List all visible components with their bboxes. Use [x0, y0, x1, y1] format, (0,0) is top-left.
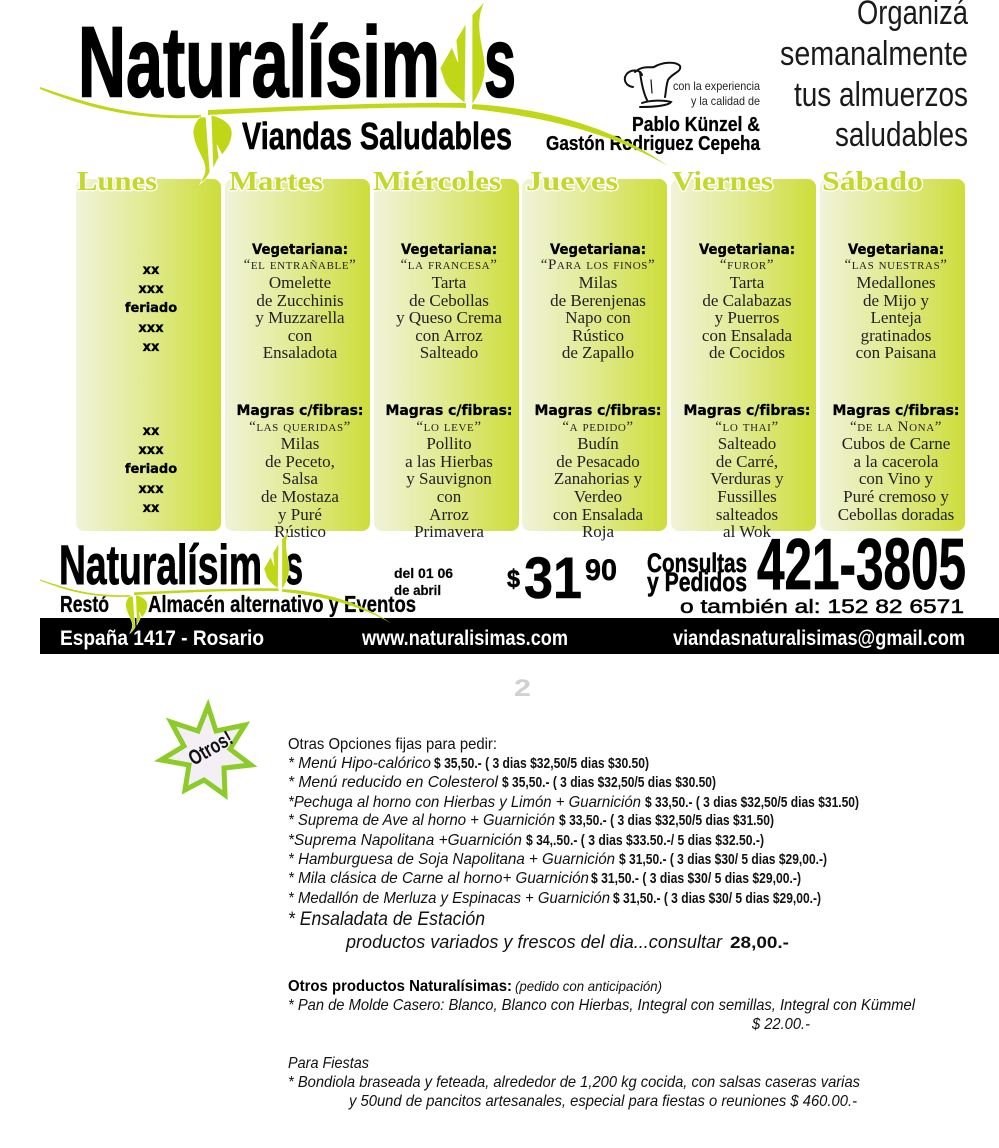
panel: Martes menu: “las queridas” — [249, 419, 351, 435]
text block: other fixed options: $ 31,50.- ( 3 dias $30/ 5 dias $29,00.-) — [613, 890, 821, 907]
title: Naturalísimas logo wordmark: Naturalísim — [78, 6, 440, 118]
text: con la experiencia — [673, 79, 760, 108]
panel: Viernes menu: de Calabazas — [702, 291, 792, 310]
text: Consultas y Pedidos — [647, 548, 747, 597]
panel: Martes menu: Ensaladota — [263, 343, 338, 362]
panel: Martes menu: Milas — [281, 434, 319, 453]
panel: Martes menu: con — [288, 326, 313, 345]
text: Restó Almacén alternativo y Eventos — [60, 591, 416, 617]
panel: Miércoles menu: con Arroz — [415, 326, 483, 345]
text block: other products — [288, 978, 915, 1033]
text: chefs names — [546, 114, 761, 155]
panel: Miércoles menu: “la francesa” — [400, 257, 498, 273]
panel: Martes menu: y Muzzarella — [255, 308, 345, 327]
footer bar: address and contact — [40, 618, 999, 654]
panel: Miércoles menu: Tarta — [432, 273, 467, 292]
panel: Jueves menu — [534, 242, 662, 541]
panel: Sábado menu: “de la Nona” — [850, 419, 942, 435]
logo: footer Naturalísimas wordmark: s — [285, 533, 303, 596]
panel: Miércoles menu: y Sauvignon — [406, 469, 492, 488]
panel: Sábado menu: con Paisana — [856, 343, 937, 362]
panel: Viernes menu — [684, 242, 810, 541]
slogan: Organizá semanalmente — [780, 0, 968, 154]
text: con la experiencia: y la calidad de — [691, 94, 760, 108]
footer bar: address and contact: España 1417 - Rosario — [60, 627, 264, 650]
text block: other fixed options: $ 35,50.- ( 3 dias $32,50/5 dias $30.50) — [502, 774, 716, 791]
heading: Jueves: Jueves — [526, 166, 618, 196]
price: $31.90: 31 — [524, 546, 582, 611]
panel: Jueves menu: Budín — [577, 434, 619, 453]
panel: Martes menu: de Mostaza — [261, 487, 339, 506]
text: Consultas y Pedidos: Consultas — [647, 548, 747, 578]
panel: Miércoles menu: de Cebollas — [409, 291, 489, 310]
panel: Jueves menu: “Para los finos” — [541, 257, 655, 273]
panel: Viernes menu: Magras c/fibras: — [684, 403, 810, 419]
text block: other fixed options: productos variados y frescos del dia...consultar — [345, 932, 723, 952]
panel: Lunes feriado: xx — [143, 263, 160, 278]
heading: Sábado: Sábado — [822, 166, 923, 196]
panel: Sábado menu: Cebollas doradas — [838, 505, 954, 524]
panel: Sábado menu: Cubos de Carne — [842, 434, 950, 453]
logo: footer Naturalísimas wordmark: Naturalísim — [59, 533, 262, 596]
text block: other fixed options: *Pechuga al horno con Hierbas y Limón + Guarnición — [288, 794, 641, 811]
text: date del 01 06 de abril: de abril — [394, 582, 441, 598]
text block: other fixed options: * Ensaladata de Estación — [288, 909, 485, 930]
text block: other fixed options: *Suprema Napolitana +Guarnición — [288, 832, 522, 849]
panel: Martes menu: y Puré — [278, 505, 322, 524]
price: $31.90: 90 — [585, 554, 617, 587]
panel: Sábado menu: gratinados — [861, 326, 931, 345]
panel: Viernes menu: “lo thai” — [715, 419, 779, 435]
text: chefs names: Gastón Rodriguez Cepeha — [546, 133, 761, 155]
text: date del 01 06 de abril — [394, 565, 453, 598]
panel: Sábado menu: Puré cremoso y — [843, 487, 949, 506]
panel: Viernes menu: y Puerros — [715, 308, 779, 327]
text block: other products: $ 22.00.- — [751, 1016, 810, 1033]
text block: other fixed options: $ 31,50.- ( 3 dias $30/ 5 dias $29,00.-) — [619, 851, 827, 868]
text block: other products: (pedido con anticipación) — [515, 978, 662, 994]
text: con la experiencia: con la experiencia — [673, 79, 760, 93]
panel: Miércoles menu: Primavera — [414, 522, 484, 541]
panel: Viernes menu: Tarta — [730, 273, 765, 292]
panel: Miércoles menu: Arroz — [429, 505, 469, 524]
panel: Miércoles menu: con — [437, 487, 462, 506]
panel: day columns background — [76, 179, 965, 531]
badge: Otros! star — [161, 706, 251, 795]
panel: Sábado menu: de Mijo y — [863, 291, 930, 310]
heading: Martes: Martes — [229, 166, 323, 196]
text block: para fiestas: y 50und de pancitos artesanales, especial para fiestas o reuniones $ 460.00.- — [348, 1093, 857, 1110]
panel: Jueves menu: Rústico — [572, 326, 624, 345]
text block: other fixed options: $ 35,50.- ( 3 dias $32,50/5 dias $30.50) — [434, 755, 649, 772]
text block: other fixed options: $ 33,50.- ( 3 dias $32,50/5 dias $31.50) — [559, 812, 774, 829]
panel: Lunes feriado — [125, 263, 177, 516]
text block: para fiestas: Para Fiestas — [288, 1055, 369, 1072]
text block: para fiestas — [288, 1055, 860, 1110]
icon: logo leaves and stem — [40, 0, 668, 184]
panel: Miércoles menu: y Queso Crema — [396, 308, 502, 327]
text block: other fixed options: * Medallón de Merluza y Espinacas + Guarnición — [288, 890, 610, 907]
panel: Martes menu — [236, 242, 364, 541]
text block: para fiestas: * Bondiola braseada y feteada, alrededor de 1,200 kg cocida, con salsas caseras varias — [288, 1074, 860, 1091]
panel: Miércoles menu — [386, 242, 512, 541]
badge: Otros! star: Otros! — [185, 727, 237, 770]
text: chefs names: Pablo Künzel & — [632, 114, 760, 136]
panel: Sábado menu — [832, 242, 960, 524]
panel: Sábado menu: Magras c/fibras: — [832, 403, 960, 419]
price: $31.90 — [507, 546, 617, 611]
text block: other fixed options: Otras Opciones fijas para pedir: — [288, 736, 497, 753]
panel: Viernes menu: Salteado — [718, 434, 776, 453]
panel: Viernes menu: de Cocidos — [709, 343, 785, 362]
panel: Miércoles menu: Pollito — [426, 434, 472, 453]
slogan: Organizá semanalmente: semanalmente — [780, 35, 968, 73]
panel: Jueves menu: de Pesacado — [556, 452, 640, 471]
panel: Jueves menu: de Berenjenas — [550, 291, 646, 310]
panel: Sábado menu: con Vino y — [859, 469, 934, 488]
panel: Viernes menu: salteados — [716, 505, 778, 524]
text block: other fixed options: $ 31,50.- ( 3 dias $30/ 5 dias $29,00.-) — [591, 870, 801, 887]
panel: Lunes feriado: feriado — [125, 301, 177, 316]
panel: Jueves menu: Verdeo — [574, 487, 622, 506]
slogan: Organizá semanalmente: saludables — [835, 116, 968, 154]
text block: other products: * Pan de Molde Casero: Blanco, Blanco con Hierbas, Integral con semillas, Integral con Kümmel — [288, 997, 915, 1014]
text: alternate phone: o también al: 152 82 6571 — [680, 597, 964, 618]
panel: Lunes feriado: feriado — [125, 462, 177, 477]
panel: Lunes feriado: xx — [143, 424, 160, 439]
text block: other fixed options: $ 33,50.- ( 3 dias $32,50/5 dias $31.50) — [645, 794, 859, 811]
panel: Martes menu: Salsa — [282, 469, 318, 488]
panel: Martes menu: Rústico — [274, 522, 326, 541]
icon: footer logo leaves and stem — [40, 531, 392, 634]
panel: Martes menu: de Peceto, — [265, 452, 335, 471]
panel: Miércoles menu: Vegetariana: — [401, 242, 497, 258]
text block: other fixed options: * Mila clásica de Carne al horno+ Guarnición — [288, 870, 589, 887]
text block: other fixed options: 28,00.- — [730, 933, 789, 952]
panel: Viernes menu: con Ensalada — [702, 326, 793, 345]
panel: Lunes feriado: xxx — [138, 282, 164, 297]
panel: Lunes feriado: xx — [143, 340, 160, 355]
text: Restó Almacén alternativo y Eventos: Restó — [60, 591, 109, 617]
text: date del 01 06 de abril: del 01 06 — [394, 565, 453, 581]
price: $31.90: $ — [507, 565, 520, 593]
panel: Sábado menu: Medallones — [856, 273, 936, 292]
panel: Lunes feriado: xxx — [138, 443, 164, 458]
panel: Martes menu: Omelette — [269, 273, 331, 292]
panel: Lunes feriado: xx — [143, 501, 160, 516]
panel: Sábado menu: “las nuestras” — [844, 257, 948, 273]
panel: Miércoles menu: Salteado — [420, 343, 478, 362]
panel: Jueves menu: de Zapallo — [562, 343, 634, 362]
text: Restó Almacén alternativo y Eventos: Almacén alternativo y Eventos — [148, 591, 416, 617]
footer bar: address and contact: www.naturalisimas.com — [361, 627, 568, 650]
panel: Jueves menu: Napo con — [565, 308, 631, 327]
panel: Martes menu: Magras c/fibras: — [236, 403, 364, 419]
panel: Miércoles menu: Magras c/fibras: — [386, 403, 512, 419]
page number: 2 — [514, 675, 531, 702]
subtitle: Viandas Saludables: Viandas Saludables — [242, 116, 512, 158]
panel: Viernes menu: al Wok — [723, 522, 771, 541]
text block: other fixed options: * Suprema de Ave al horno + Guarnición — [288, 812, 555, 829]
panel: Jueves menu: Roja — [582, 522, 615, 541]
panel: Sábado menu: a la cacerola — [854, 452, 939, 471]
panel: Jueves menu: “a pedido” — [562, 419, 634, 435]
text block: other fixed options — [288, 736, 859, 952]
panel: Jueves menu: Milas — [579, 273, 617, 292]
text block: other fixed options: * Hamburguesa de Soja Napolitana + Guarnición — [288, 851, 615, 868]
panel: Martes menu: Vegetariana: — [252, 242, 348, 258]
panel: Jueves menu: Vegetariana: — [550, 242, 646, 258]
panel: Lunes feriado: xxx — [138, 321, 164, 336]
heading: Lunes: Lunes — [77, 166, 157, 196]
panel: Miércoles menu: a las Hierbas — [405, 452, 493, 471]
panel: Viernes menu: “furor” — [720, 257, 774, 273]
title: Naturalísimas logo wordmark: s — [484, 6, 516, 118]
text block: other fixed options: $ 34,.50.- ( 3 dias $33.50.-/ 5 dias $32.50.-) — [526, 832, 764, 849]
panel: Lunes feriado: xxx — [138, 482, 164, 497]
panel: Martes menu: “el entrañable” — [244, 257, 356, 273]
text block: other products: Otros productos Naturalísimas: — [288, 978, 512, 995]
heading: Viernes: Viernes — [672, 166, 773, 196]
text: Consultas y Pedidos: y Pedidos — [647, 567, 747, 597]
panel: Miércoles menu: “lo leve” — [416, 419, 482, 435]
panel: Sábado menu: Vegetariana: — [848, 242, 944, 258]
icon: chef hat — [625, 63, 680, 107]
text block: other fixed options: * Menú Hipo-calórico — [288, 755, 431, 772]
panel: Martes menu: de Zucchinis — [256, 291, 344, 310]
heading: Miércoles: Miércoles — [373, 166, 501, 196]
panel: Sábado menu: Lenteja — [871, 308, 922, 327]
panel: Viernes menu: de Carré, — [716, 452, 778, 471]
text block: other fixed options: * Menú reducido en Colesterol — [288, 774, 498, 791]
panel: Jueves menu: Zanahorias y — [554, 469, 643, 488]
panel: Viernes menu: Fussilles — [717, 487, 777, 506]
panel: Viernes menu: Vegetariana: — [699, 242, 795, 258]
panel: Jueves menu: con Ensalada — [553, 505, 644, 524]
panel: Jueves menu: Magras c/fibras: — [534, 403, 662, 419]
panel: Viernes menu: Verduras y — [710, 469, 784, 488]
